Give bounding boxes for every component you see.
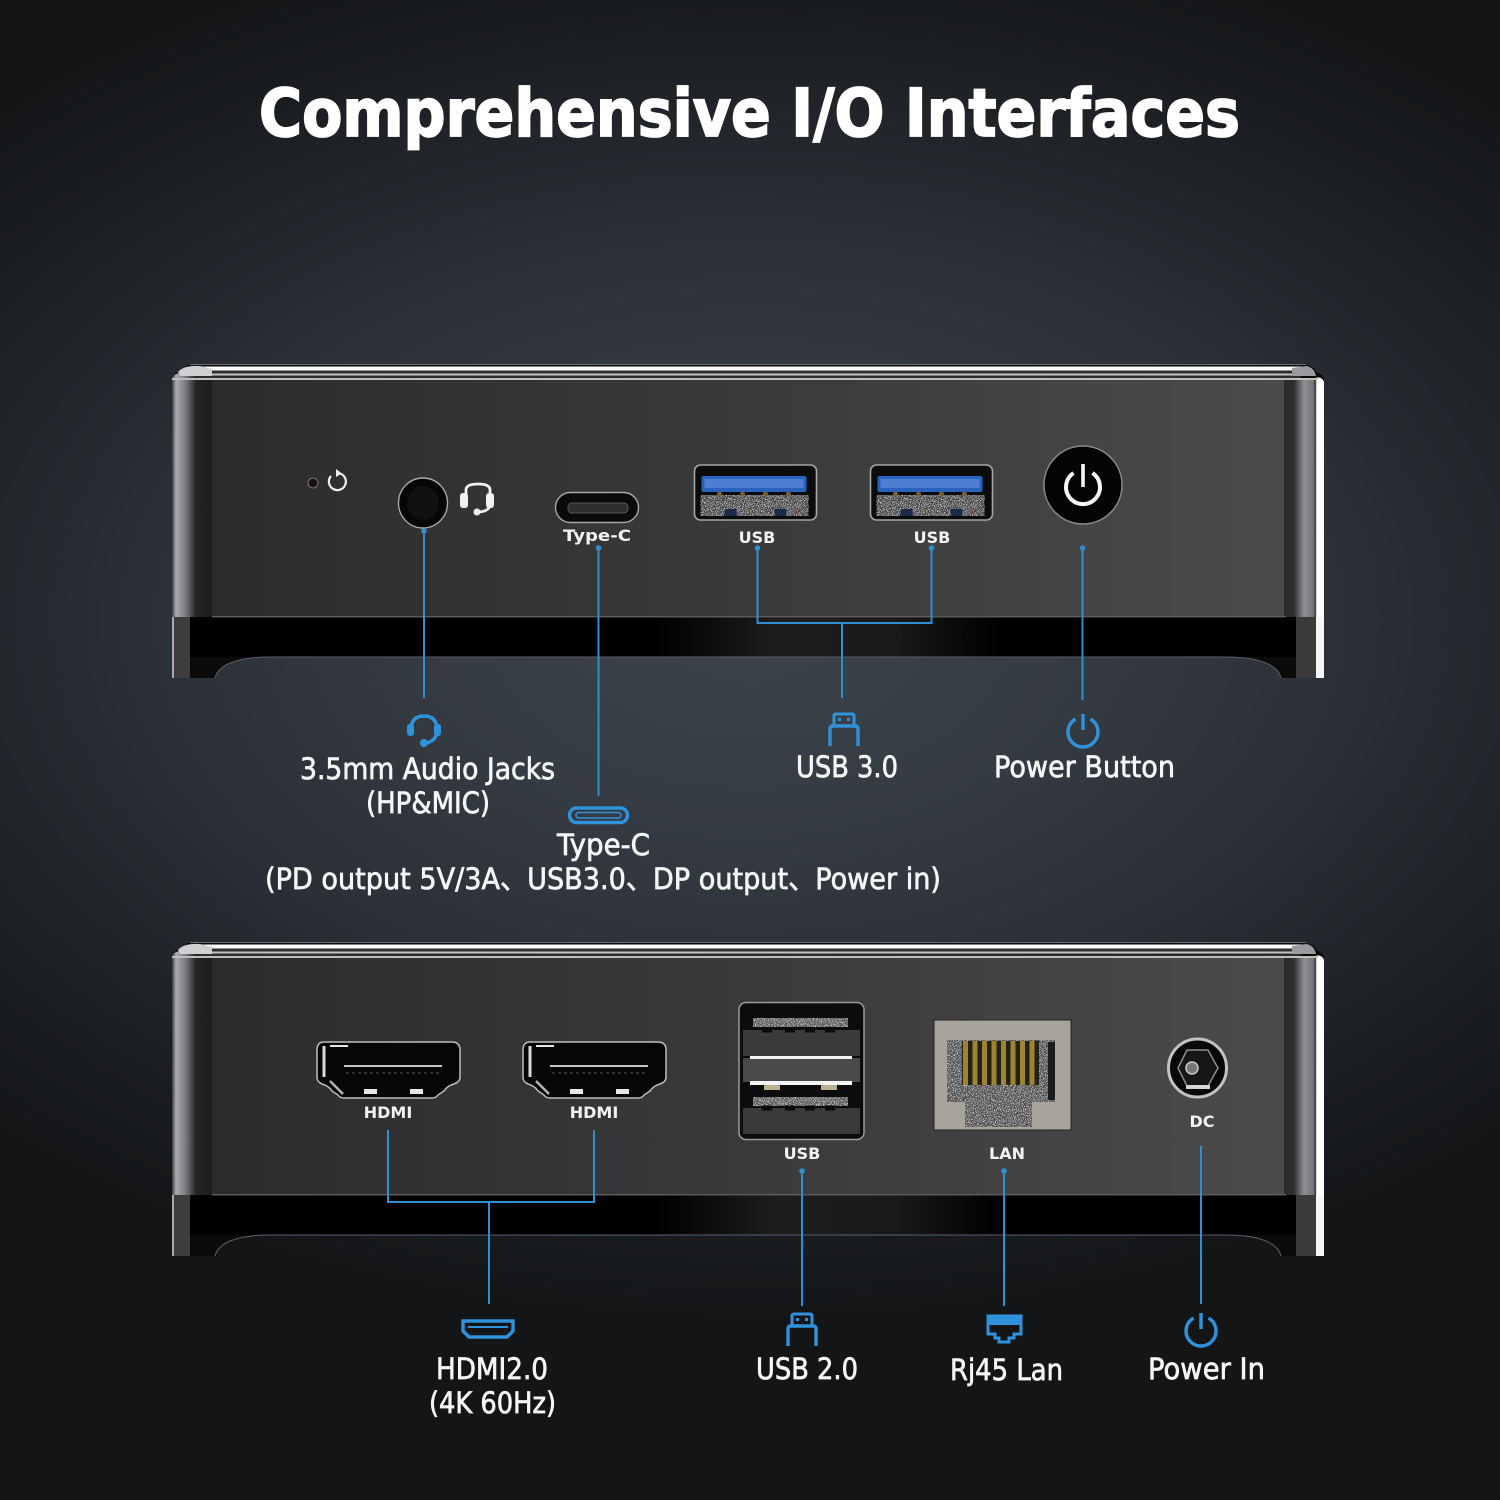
- port: DC jack: [1168, 1039, 1226, 1097]
- label: USB 2.0: USB 2.0: [756, 1352, 858, 1386]
- port: USB 3.0 right: [870, 465, 992, 520]
- label: USB 3.0: USB 3.0: [796, 750, 898, 784]
- leader line: USB 2.0: [799, 1168, 805, 1306]
- port: USB 3.0 left: [694, 465, 816, 520]
- port: Type-C: [556, 492, 638, 522]
- port: audio jack: [398, 478, 448, 528]
- button: power: [1044, 446, 1122, 524]
- port label: HDMI left: HDMI: [364, 1103, 412, 1122]
- leader line: LAN: [1001, 1168, 1007, 1306]
- port: HDMI left: [317, 1042, 460, 1098]
- port: dual USB 2.0: [739, 1002, 864, 1140]
- leader line: USB 3.0: [755, 545, 934, 698]
- port label: USB: USB: [784, 1144, 820, 1163]
- leader line: Type-C: [596, 545, 601, 796]
- port label: LAN: LAN: [989, 1144, 1025, 1163]
- label: audio jacks: 3.5mm Audio Jacks: [300, 752, 555, 786]
- icon: blue power: [1068, 714, 1098, 747]
- label: Power In: Power In: [1148, 1352, 1265, 1386]
- port label: HDMI right: HDMI: [570, 1103, 618, 1122]
- label: HDMI2.0: (4K 60Hz): [429, 1386, 556, 1420]
- port: LAN: [934, 1020, 1071, 1130]
- label: Type-C details: [265, 828, 941, 896]
- icon: blue USB 3.0: [830, 714, 858, 746]
- leader line: power button: [1080, 545, 1085, 700]
- icon: reset pinhole and symbol: [308, 469, 346, 490]
- panel: rear of mini PC: [172, 942, 1324, 1256]
- label: Type-C details: (PD output 5V/3A、USB3.0、DP output、Power in): [265, 862, 941, 896]
- label: HDMI2.0: [429, 1352, 556, 1420]
- port label: Type-C: Type-C: [563, 526, 631, 545]
- title: Comprehensive I/O Interfaces: [259, 75, 1240, 152]
- port label: USB right: USB: [914, 528, 950, 547]
- label: audio jacks: [300, 752, 555, 820]
- panel: front of mini PC: [172, 364, 1324, 678]
- port: HDMI right: [523, 1042, 666, 1098]
- port label: USB left: USB: [739, 528, 775, 547]
- icon: blue headset: [407, 716, 441, 747]
- leader line: power in: [1200, 1146, 1202, 1304]
- icon: blue Type-C: [570, 808, 628, 822]
- label: audio jacks: (HP&MIC): [366, 786, 490, 820]
- icon: blue RJ45: [988, 1316, 1021, 1342]
- icon: headset: [460, 484, 494, 516]
- leader line: audio: [421, 528, 427, 698]
- label: Power Button: Power Button: [994, 750, 1175, 784]
- port label: DC: DC: [1189, 1112, 1215, 1131]
- label: Rj45 Lan: Rj45 Lan: [950, 1353, 1063, 1387]
- label: HDMI2.0: HDMI2.0: [436, 1352, 548, 1386]
- label: Type-C details: Type-C: [556, 828, 650, 862]
- leader line: HDMI: [388, 1130, 594, 1304]
- icon: blue HDMI: [463, 1321, 513, 1337]
- icon: blue USB 2.0: [788, 1314, 816, 1346]
- icon: blue power in: [1186, 1313, 1216, 1346]
